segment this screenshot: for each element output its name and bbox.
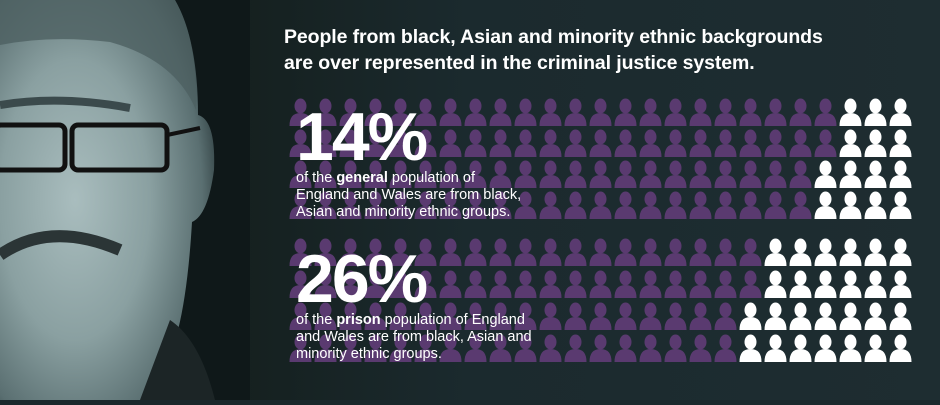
stat: 26% prison population: minority ethnic groups. (296, 346, 442, 362)
stat: 14% general population (296, 99, 521, 220)
stat: 14% general population: of the general population of (296, 170, 475, 186)
stat: 26% prison population: 26% (296, 241, 426, 317)
title: People from black, Asian and minority ethnic backgrounds (284, 26, 823, 48)
stat: 14% general population: England and Wales are from black, (296, 187, 521, 203)
stat: 14% general population: Asian and minority ethnic groups. (296, 204, 510, 220)
photo: man's portrait (0, 0, 250, 400)
title: are over represented in the criminal justice system. (284, 52, 755, 74)
stat: 14% general population: 14% (296, 99, 426, 175)
stat: 26% prison population: and Wales are from black, Asian and (296, 329, 532, 345)
title (284, 26, 823, 74)
stat: 26% prison population (296, 241, 532, 362)
stat: 26% prison population: of the prison population of England (296, 312, 525, 328)
